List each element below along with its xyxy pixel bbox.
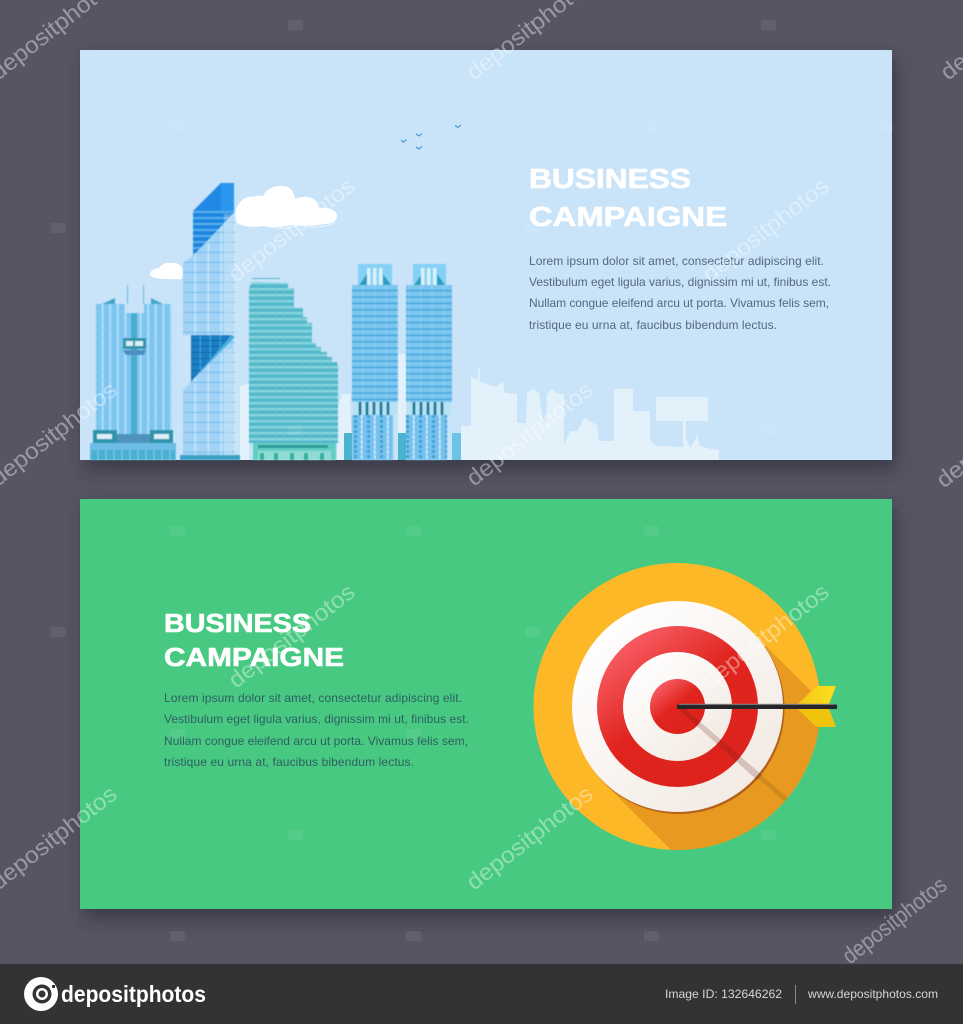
watermarks: depositphotos	[461, 376, 598, 491]
billboard	[656, 397, 708, 444]
building: tower with pod	[90, 285, 176, 460]
body text: target banner: Lorem ipsum dolor sit amet, consectetur adipiscing elit.	[164, 691, 462, 705]
building: twin tower right	[406, 264, 452, 460]
watermarks: depositphotos	[697, 172, 834, 287]
birds	[401, 125, 461, 149]
watermarks: depositphotos	[697, 578, 834, 693]
building: stepped teal tower	[249, 278, 338, 460]
heading: city banner	[529, 163, 727, 232]
body text: target banner: tristique eu urna at, faucibus bibendum lectus.	[164, 755, 414, 769]
heading: target banner: CAMPAIGNE	[164, 642, 344, 672]
footer bar	[0, 964, 963, 1024]
building: diagonal glass tower	[180, 183, 240, 460]
body text: city banner: Lorem ipsum dolor sit amet, consectetur adipiscing elit.	[529, 254, 824, 268]
panel: city banner	[80, 50, 896, 470]
image id: Image ID: 132646262	[665, 987, 782, 1001]
divider	[795, 985, 796, 1004]
body text: target banner: Nullam congue eleifend arcu ut porta. Vivamus felis sem,	[164, 734, 468, 748]
icon: target with arrow	[534, 563, 837, 850]
heading: target banner	[164, 608, 344, 672]
logo wordmark: depositphotos	[61, 981, 206, 1007]
watermarks: depositphotos	[223, 578, 360, 693]
icon: camera logo	[24, 977, 58, 1011]
website url: www.depositphotos.com	[807, 987, 938, 1001]
small cloud	[150, 263, 183, 279]
small camera watermarks	[51, 20, 893, 941]
body text: city banner: Nullam congue eleifend arcu ut porta. Vivamus felis sem,	[529, 296, 829, 310]
side blocks	[344, 433, 461, 460]
body text: target banner	[164, 691, 469, 769]
heading: city banner: CAMPAIGNE	[529, 201, 727, 232]
heading: city banner: BUSINESS	[529, 163, 691, 194]
watermarks: depositphotos	[223, 172, 360, 287]
heading: target banner: BUSINESS	[164, 608, 311, 638]
watermarks: depositphotos	[461, 780, 598, 895]
building: twin tower left	[352, 264, 398, 460]
panel: target banner	[78, 499, 902, 926]
big cloud	[235, 186, 337, 228]
body text: city banner	[529, 254, 831, 332]
body text: target banner: Vestibulum eget ligula varius, dignissim mi ut, finibus est.	[164, 712, 469, 726]
body text: city banner: Vestibulum eget ligula varius, dignissim mi ut, finibus est.	[529, 275, 831, 289]
watermarks: depositphotos	[837, 871, 952, 969]
body text: city banner: tristique eu urna at, faucibus bibendum lectus.	[529, 318, 777, 332]
skyline silhouette	[240, 354, 719, 460]
